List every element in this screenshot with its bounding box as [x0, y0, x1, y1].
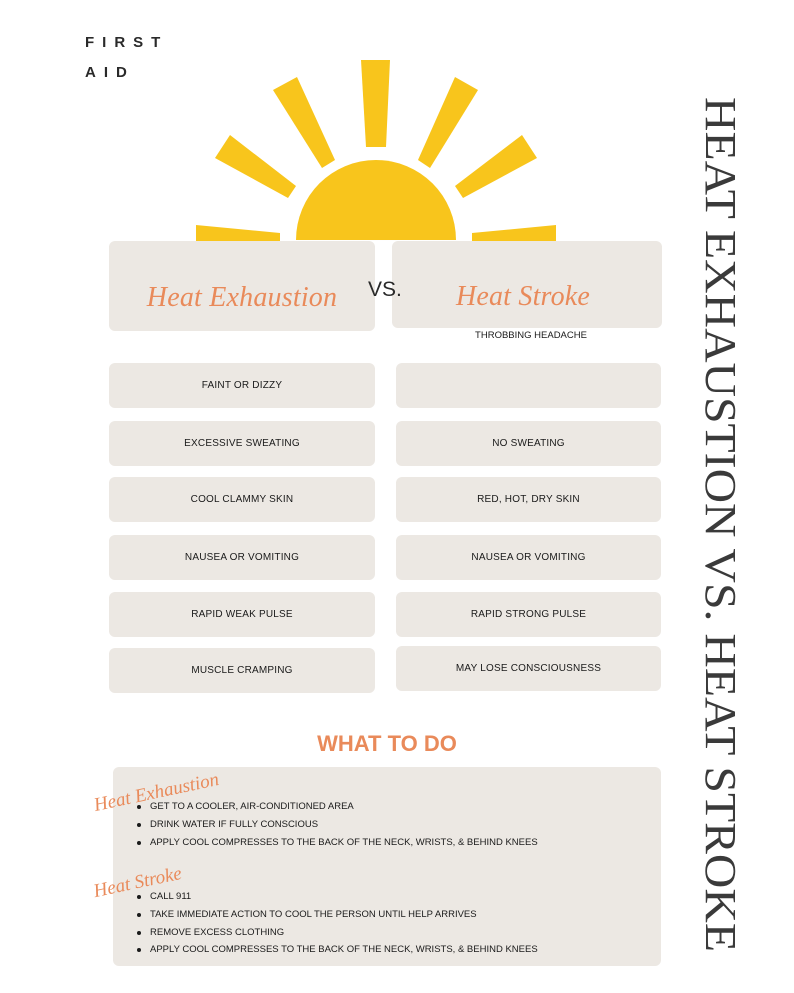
panel: stroke symptoms: NO SWEATING — [492, 438, 565, 449]
panel: stroke symptoms: MAY LOSE CONSCIOUSNESS — [456, 663, 601, 674]
panel: exhaustion symptoms: EXCESSIVE SWEATING — [184, 438, 300, 449]
text: throbbing headache: THROBBING HEADACHE — [475, 330, 587, 341]
panel: stroke symptoms — [396, 363, 661, 691]
panel: exhaustion symptoms: NAUSEA OR VOMITING — [185, 552, 299, 563]
text: exhaustion steps: GET TO A COOLER, AIR-CONDITIONED AREA — [150, 801, 354, 812]
heading: first aid: FIRST — [85, 34, 168, 51]
text: exhaustion steps: REMOVE EXCESS CLOTHING — [150, 927, 284, 938]
text: exhaustion steps: CALL 911 — [150, 891, 191, 902]
heading: what to do: WHAT TO DO — [317, 731, 457, 756]
icon: sun — [196, 60, 556, 241]
panel: heat exhaustion header: Heat Exhaustion — [147, 282, 337, 313]
panel: stroke symptoms: RAPID STRONG PULSE — [471, 609, 586, 620]
text: exhaustion steps: Heat Stroke — [92, 863, 184, 902]
heading: first aid — [85, 34, 168, 81]
panel: heat stroke header — [392, 241, 662, 328]
text: vs: VS. — [368, 278, 402, 301]
panel: exhaustion symptoms — [109, 363, 375, 693]
panel: heat exhaustion header — [109, 241, 375, 331]
panel: exhaustion symptoms: COOL CLAMMY SKIN — [191, 494, 293, 505]
panel: stroke symptoms: RED, HOT, DRY SKIN — [477, 494, 580, 505]
text: exhaustion steps: DRINK WATER IF FULLY CONSCIOUS — [150, 819, 318, 830]
text: exhaustion steps: APPLY COOL COMPRESSES TO THE BACK OF THE NECK, WRISTS, & BEHIND KNEES — [150, 944, 538, 955]
text: exhaustion steps: Heat Exhaustion — [92, 769, 221, 816]
panel: exhaustion symptoms: FAINT OR DIZZY — [202, 380, 282, 391]
heading: first aid: AID — [85, 64, 135, 81]
text: exhaustion steps: TAKE IMMEDIATE ACTION TO COOL THE PERSON UNTIL HELP ARRIVES — [150, 909, 477, 920]
text: exhaustion steps: APPLY COOL COMPRESSES TO THE BACK OF THE NECK, WRISTS, & BEHIND KNEES — [150, 837, 538, 848]
panel: exhaustion symptoms: RAPID WEAK PULSE — [191, 609, 293, 620]
panel: what to do — [113, 767, 661, 966]
title: vertical: HEAT EXHAUSTION VS. HEAT STROKE — [696, 97, 745, 952]
panel: stroke symptoms: NAUSEA OR VOMITING — [471, 552, 586, 563]
panel: heat stroke header: Heat Stroke — [456, 280, 590, 312]
panel: exhaustion symptoms: MUSCLE CRAMPING — [191, 665, 293, 676]
